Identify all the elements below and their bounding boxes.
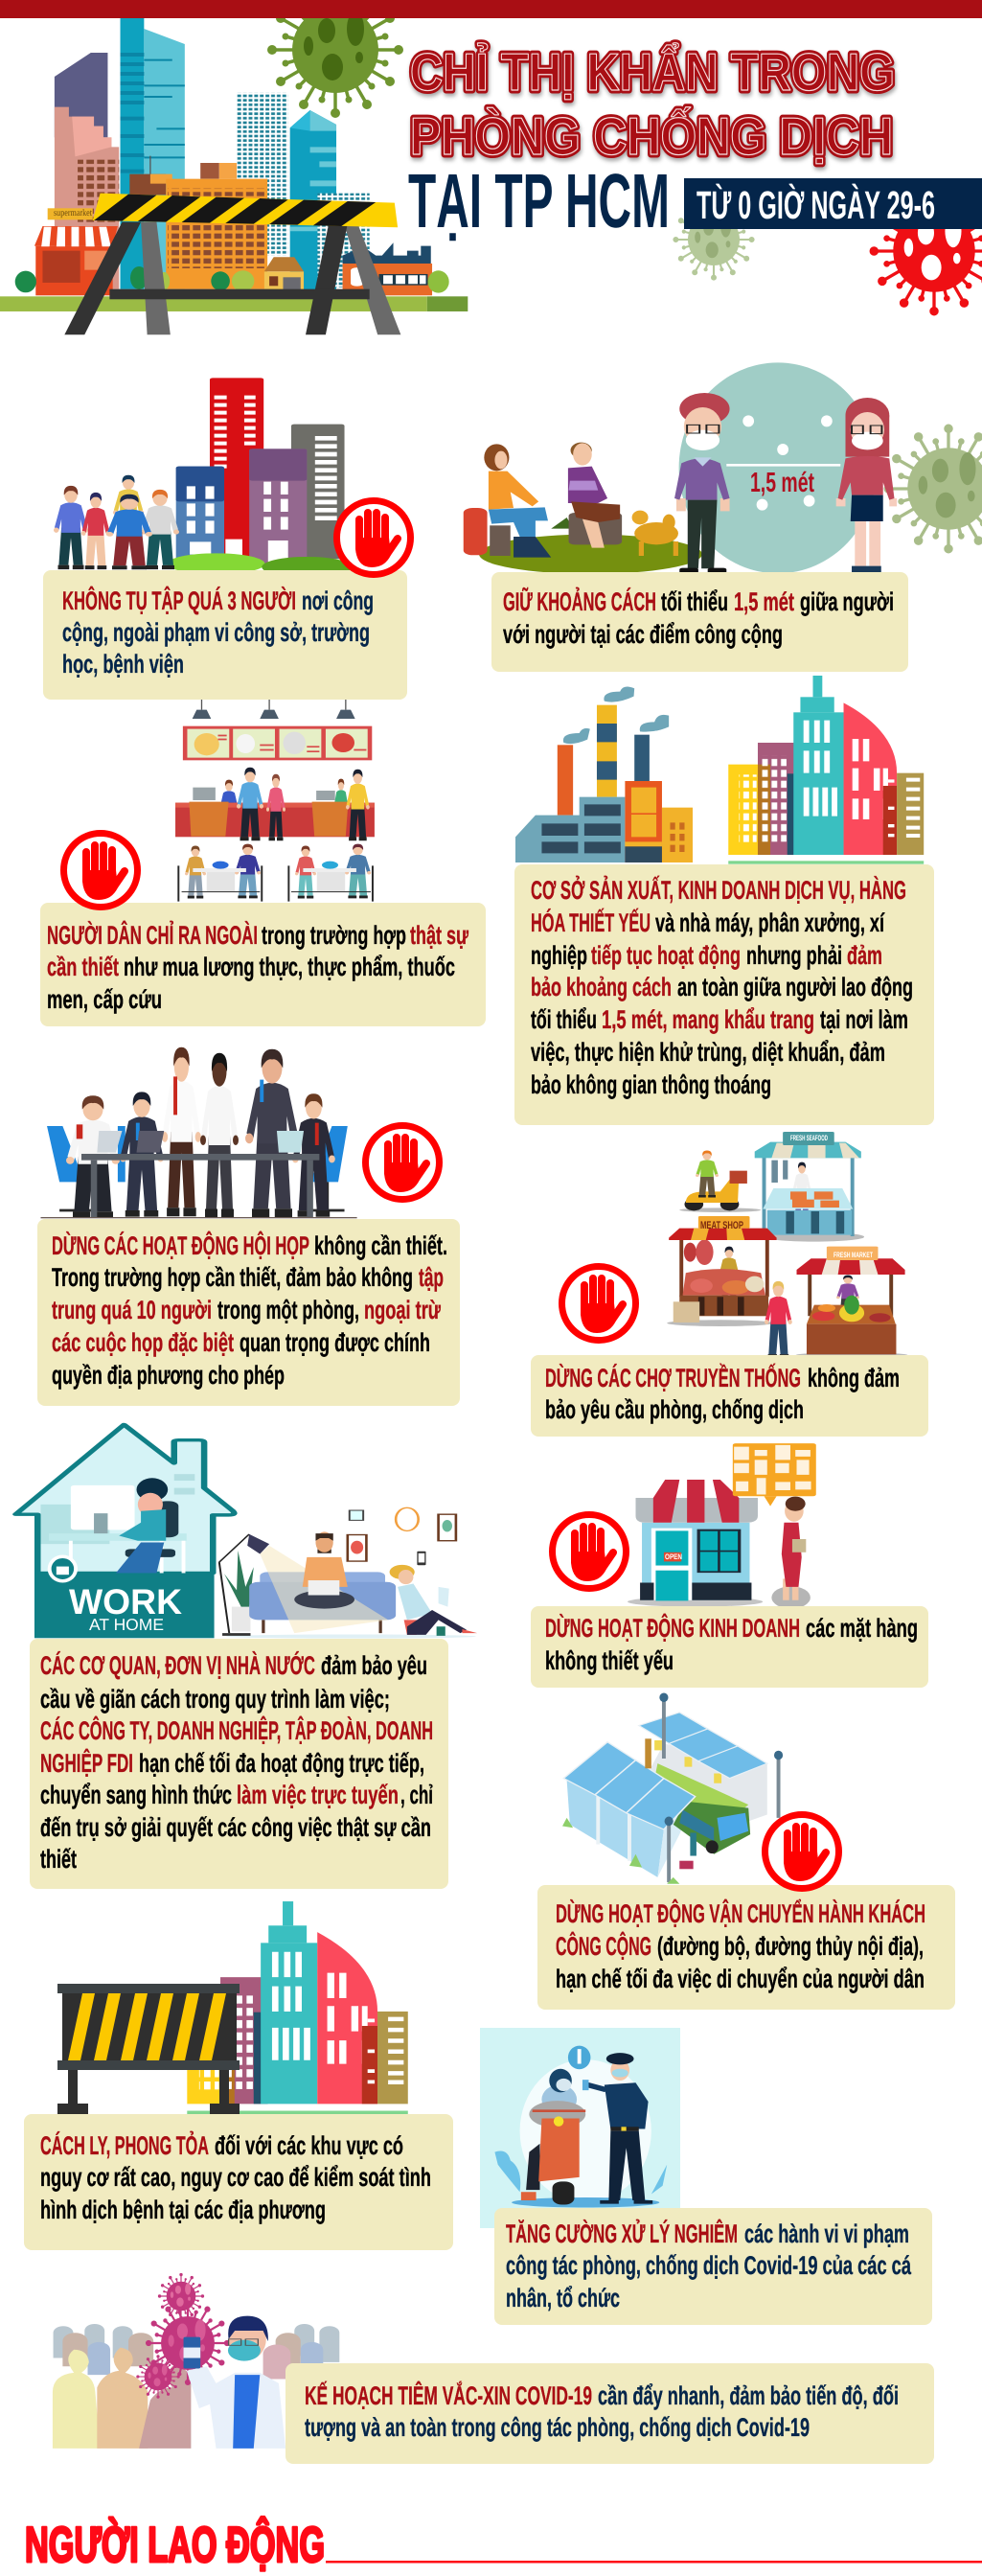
shopper (765, 1281, 792, 1358)
panel text: nhân, tổ chức (506, 2284, 620, 2312)
panel text: TĂNG CƯỜNG XỬ LÝ NGHIÊM (506, 2219, 738, 2248)
sellers and customers (219, 779, 349, 836)
panel text: đối với các khu vực có (215, 2131, 403, 2160)
panel: production and business (514, 864, 934, 1125)
panel text: Trong trường hợp cần thiết, đảm bảo không (52, 1263, 413, 1292)
fresh market stall (795, 1247, 908, 1359)
house (15, 1425, 234, 1638)
panel text: tại nơi làm (820, 1005, 908, 1034)
queueing customers (237, 768, 370, 840)
panel text: tối thiểu (661, 587, 728, 616)
panel text: như mua lương thực, thực phẩm, thuốc (124, 953, 455, 981)
panel text: nghiệp (531, 941, 587, 970)
panel text: trong trường hợp (262, 921, 406, 950)
illustration: social distancing (464, 362, 982, 574)
panel text: bảo không gian thông thoáng (531, 1070, 771, 1099)
title line 2: PHÒNG CHỐNG DỊCH (410, 106, 893, 166)
panel text: , chỉ (400, 1781, 433, 1809)
illustration: business meeting (40, 1047, 357, 1218)
meat shop stall (667, 1216, 777, 1326)
panel text (305, 2380, 899, 2442)
panel text: đảm (847, 941, 882, 970)
panel text: HÓA THIẾT YẾU (531, 908, 651, 937)
illustration: food court (175, 700, 375, 902)
title line 1: CHỈ THỊ KHẨN TRONG (410, 42, 895, 102)
doctor with vial (184, 2316, 285, 2449)
illustration: police checkpoint (480, 2028, 680, 2228)
illustration: traditional markets (667, 1132, 908, 1359)
panel: isolation and lockdown (24, 2114, 453, 2250)
illustration: crowd and buildings (54, 378, 360, 578)
panel text: các cuộc họp đặc biệt (52, 1328, 234, 1357)
road block (57, 1984, 240, 2114)
panel text: đảm bảo yêu (321, 1651, 427, 1680)
title line 3: TẠI TP HCM (408, 158, 670, 243)
illustration: vaccine and crowd (53, 2275, 339, 2449)
panel: go out only when necessary (40, 903, 486, 1026)
fresh market sign: FRESH MARKET (834, 1251, 873, 1259)
panel text (531, 875, 913, 1099)
panel text: NGƯỜI DÂN CHỈ RA NGOÀI (47, 920, 258, 950)
panel text (545, 1363, 900, 1424)
panel text: tập (419, 1263, 444, 1292)
icon: stop hand 4 (561, 1267, 636, 1340)
title line 2: PHÒNG CHỐNG DỊCH (410, 106, 893, 166)
title line 1: CHỈ THỊ KHẨN TRONG (410, 42, 895, 102)
supermarket sign: supermarket (54, 208, 92, 218)
speech bubble with goods (733, 1443, 816, 1506)
shopper in red dress (771, 1497, 811, 1609)
panel text: nguy cơ rất cao, nguy cơ cao để kiểm soát tình (40, 2163, 431, 2192)
seafood sign: FRESH SEAFOOD (790, 1134, 828, 1142)
panel text: KẾ HOẠCH TIÊM VẮC-XIN COVID-19 (305, 2380, 592, 2410)
panel text: cộng, ngoài phạm vi công sở, trường (62, 618, 370, 647)
panel: no gatherings (43, 570, 407, 700)
panel: keep distance (491, 572, 908, 672)
panel: stop non-essential business (531, 1606, 928, 1688)
icon: stop hand 6 (765, 1815, 839, 1888)
panel: stop traditional markets (531, 1355, 928, 1437)
panel text (52, 1230, 447, 1390)
panel text (545, 1613, 918, 1675)
city (728, 676, 924, 864)
city (187, 1901, 408, 2114)
panel text: quyền địa phương cho phép (52, 1361, 285, 1390)
woman with mask (836, 398, 897, 574)
panel text: NGHIỆP FDI (40, 1748, 133, 1778)
panel text (503, 586, 894, 649)
panel text: KHÔNG TỤ TẬP QUÁ 3 NGƯỜI (62, 586, 296, 615)
icon: red virus (874, 191, 982, 311)
panel text: bảo yêu cầu phòng, chống dịch (545, 1395, 804, 1424)
panel: stop public transport (537, 1885, 955, 2010)
header banner (0, 0, 982, 334)
panel text (47, 920, 468, 1014)
illustration: work at home (15, 1425, 477, 1639)
illustration: city skyline with barricade (0, 18, 468, 334)
panel text: trong một phòng, (217, 1296, 359, 1324)
illustration: shop with shopper (628, 1443, 816, 1609)
top red bar (0, 0, 982, 18)
living room scene (219, 1507, 477, 1639)
icon: stop hand 2 (63, 834, 138, 907)
panel text: nơi công (302, 586, 374, 615)
panel text: 1,5 mét, mang khẩu trang (602, 1005, 814, 1034)
panel text: DỪNG CÁC HOẠT ĐỘNG HỘI HỌP (52, 1230, 309, 1260)
illustration: city with road block (57, 1901, 408, 2114)
at home sublabel: AT HOME (89, 1616, 164, 1634)
icon: stop hand 3 (366, 1125, 439, 1200)
panel text: trung quá 10 người (52, 1296, 212, 1324)
panel text: CÁC CƠ QUAN, ĐƠN VỊ NHÀ NƯỚC (40, 1651, 315, 1680)
panel text: nhưng phải (746, 941, 842, 970)
panel text: tiếp tục hoạt động (591, 941, 741, 970)
panel: stricter enforcement (494, 2208, 932, 2325)
panel text: đến trụ sở giải quyết các công việc thật sự cần (40, 1813, 431, 1842)
panel: stop meetings (37, 1219, 460, 1406)
panel text: GIỮ KHOẢNG CÁCH (503, 586, 656, 616)
footer logo: NGƯỜI LAO ĐỘNG (25, 2517, 325, 2573)
panel text: thiết (40, 1845, 77, 1874)
panel: state agencies and enterprises (30, 1639, 448, 1889)
meeting people (66, 1047, 335, 1218)
virus cluster (138, 2275, 227, 2397)
people group (54, 475, 179, 569)
panel text: với người tại các điểm công cộng (503, 620, 783, 649)
icon: green virus (272, 0, 399, 113)
icon: sage virus (675, 201, 752, 278)
panel text (62, 586, 374, 678)
seafood stall (755, 1132, 864, 1242)
illustration: factory and city (515, 676, 924, 864)
panel text: thật sự (410, 921, 468, 950)
icon: sage virus right (888, 428, 982, 549)
panel text: học, bệnh viện (62, 650, 184, 678)
illustration: bus stop (562, 1692, 783, 1884)
panel text: giữa người (800, 587, 894, 616)
work at home label: WORK (69, 1582, 182, 1622)
panel text: DỪNG CÁC CHỢ TRUYỀN THỐNG (545, 1363, 801, 1392)
panel text (506, 2219, 912, 2312)
meat shop sign: MEAT SHOP (700, 1220, 743, 1231)
panel text: chuyển sang hình thức (40, 1781, 232, 1809)
panel text (40, 2130, 431, 2224)
man with mask (674, 393, 730, 574)
panel text: bảo khoảng cách (531, 973, 672, 1001)
panel text: không cần thiết. (314, 1231, 447, 1260)
factory (515, 686, 693, 862)
panel text (40, 1651, 433, 1874)
diners at tables (178, 844, 373, 902)
scooter rider (679, 1150, 761, 1212)
panel text: cầu về giãn cách trong quy trình làm việc; (40, 1685, 390, 1714)
distance label: 1,5 mét (750, 468, 814, 498)
icon: stop hand 1 (337, 500, 410, 575)
panel text (556, 1898, 925, 1993)
panel text: cần thiết (47, 953, 119, 981)
panel text: ngoại trừ (364, 1296, 441, 1324)
panel text: không thiết yếu (545, 1646, 674, 1675)
panel text: DỪNG HOẠT ĐỘNG KINH DOANH (545, 1613, 800, 1643)
panel text: tối thiểu (531, 1005, 597, 1034)
panel text: làm việc trực tuyến (237, 1781, 399, 1809)
open sign: OPEN (665, 1552, 682, 1561)
panel text: các mặt hàng (806, 1614, 918, 1643)
panel text: men, cấp cứu (47, 985, 162, 1014)
panel text: hình dịch bệnh tại các địa phương (40, 2196, 326, 2224)
panel text: CÔNG CỘNG (556, 1931, 651, 1961)
panel text: hạn chế tối đa hoạt động trực tiếp, (139, 1749, 424, 1778)
panel text: quan trọng được chính (240, 1328, 430, 1357)
panel text: CÁC CÔNG TY, DOANH NGHIỆP, TẬP ĐOÀN, DOANH (40, 1715, 433, 1745)
panel text: 1,5 mét (734, 587, 794, 616)
panel text: không đảm (808, 1364, 900, 1392)
icon: stop hand 5 (552, 1514, 627, 1589)
panel: vaccination plan (285, 2363, 934, 2464)
panel text: CÁCH LY, PHONG TỎA (40, 2130, 209, 2160)
